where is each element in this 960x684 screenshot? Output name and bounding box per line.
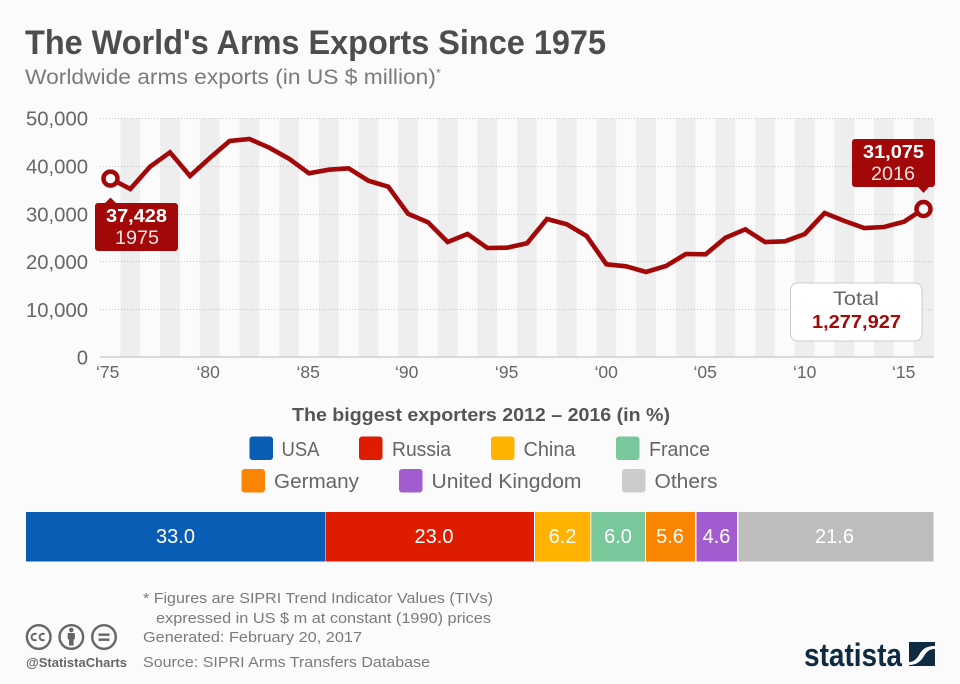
y axis labels: 50,000 <box>26 108 88 130</box>
segment: USA: 33.0 <box>156 526 195 548</box>
title: The World's Arms Exports Since 1975 <box>25 24 606 62</box>
callout: 2016: 2016 <box>871 164 915 185</box>
footnote and source: Source: SIPRI Arms Transfers Database <box>143 654 430 671</box>
x axis labels: ‘00 <box>594 362 618 382</box>
y axis labels: 10,000 <box>26 300 88 322</box>
callout: 2016: 31,075 <box>863 142 924 162</box>
legend item: China <box>491 436 576 461</box>
footnote and source: Generated: February 20, 2017 <box>143 629 362 646</box>
segment: Germany <box>646 512 695 562</box>
segment: Others: 21.6 <box>815 526 854 548</box>
segment: China <box>535 512 590 562</box>
y axis labels: 20,000 <box>26 252 88 274</box>
data line <box>110 139 924 272</box>
y axis labels: 40,000 <box>26 156 88 178</box>
legend item: Germany: Germany <box>274 471 359 493</box>
x axis labels: ‘10 <box>793 362 817 382</box>
callout: 1975: 1975 <box>115 228 159 249</box>
heading: biggest exporters: The biggest exporters 2012 – 2016 (in %) <box>292 405 670 425</box>
x axis labels: ‘90 <box>395 362 419 382</box>
subtitle: * <box>436 66 441 80</box>
marker: 1975 <box>104 172 118 186</box>
y axis labels: 0 <box>77 348 88 370</box>
x axis labels: ‘80 <box>196 362 220 382</box>
legend item: Russia <box>359 436 452 461</box>
statista charts handle: @StatistaCharts <box>26 656 127 670</box>
legend item: Russia: Russia <box>392 439 452 461</box>
segment: United Kingdom <box>696 512 737 562</box>
x axis labels <box>96 362 915 382</box>
callout: total <box>790 283 922 341</box>
logo: statista: statista <box>804 637 902 673</box>
segment: France: 6.0 <box>604 526 632 548</box>
legend item: United Kingdom: United Kingdom <box>432 471 582 493</box>
legend item: Germany <box>242 469 359 493</box>
callout: total: 1,277,927 <box>812 311 901 332</box>
footnote and source <box>143 590 493 671</box>
footnote and source: expressed in US $ m at constant (1990) prices <box>156 610 491 627</box>
legend item: Others <box>622 469 718 493</box>
line chart <box>26 108 934 382</box>
segment: France <box>591 512 645 562</box>
subtitle: Worldwide arms exports (in US $ million) <box>25 66 404 89</box>
x axis labels: ‘85 <box>296 362 320 382</box>
legend item: France <box>616 436 710 461</box>
legend item: China: China <box>524 439 576 461</box>
x axis labels: ‘05 <box>694 362 717 382</box>
segment: Russia: 23.0 <box>415 526 453 548</box>
callout: 1975 <box>95 198 178 251</box>
y axis labels <box>26 108 88 370</box>
segment: Russia <box>326 512 534 562</box>
callout: 1975: 37,428 <box>106 206 167 226</box>
y axis labels: 30,000 <box>26 204 88 226</box>
segment: United Kingdom: 4.6 <box>703 526 730 548</box>
callout: total: Total <box>833 288 879 310</box>
segment: Germany: 5.6 <box>656 526 684 548</box>
marker: 2016 <box>916 202 930 216</box>
year stripes <box>120 118 934 357</box>
legend <box>242 436 718 493</box>
icon: creative commons <box>27 625 116 649</box>
segment: USA <box>26 512 326 562</box>
legend item: Others: Others <box>654 471 718 493</box>
stacked bar <box>26 512 934 562</box>
x axis labels: ‘95 <box>495 362 518 382</box>
footnote and source: * Figures are SIPRI Trend Indicator Values (TIVs) <box>143 590 493 607</box>
legend item: USA <box>250 436 320 461</box>
segment: China: 6.2 <box>549 526 576 548</box>
x axis labels: ‘15 <box>892 362 915 382</box>
legend item: USA: USA <box>282 439 320 461</box>
x axis labels: ‘75 <box>96 362 119 382</box>
callout: 2016 <box>852 139 935 193</box>
segment: Others <box>738 512 934 562</box>
legend item: France: France <box>649 439 710 461</box>
